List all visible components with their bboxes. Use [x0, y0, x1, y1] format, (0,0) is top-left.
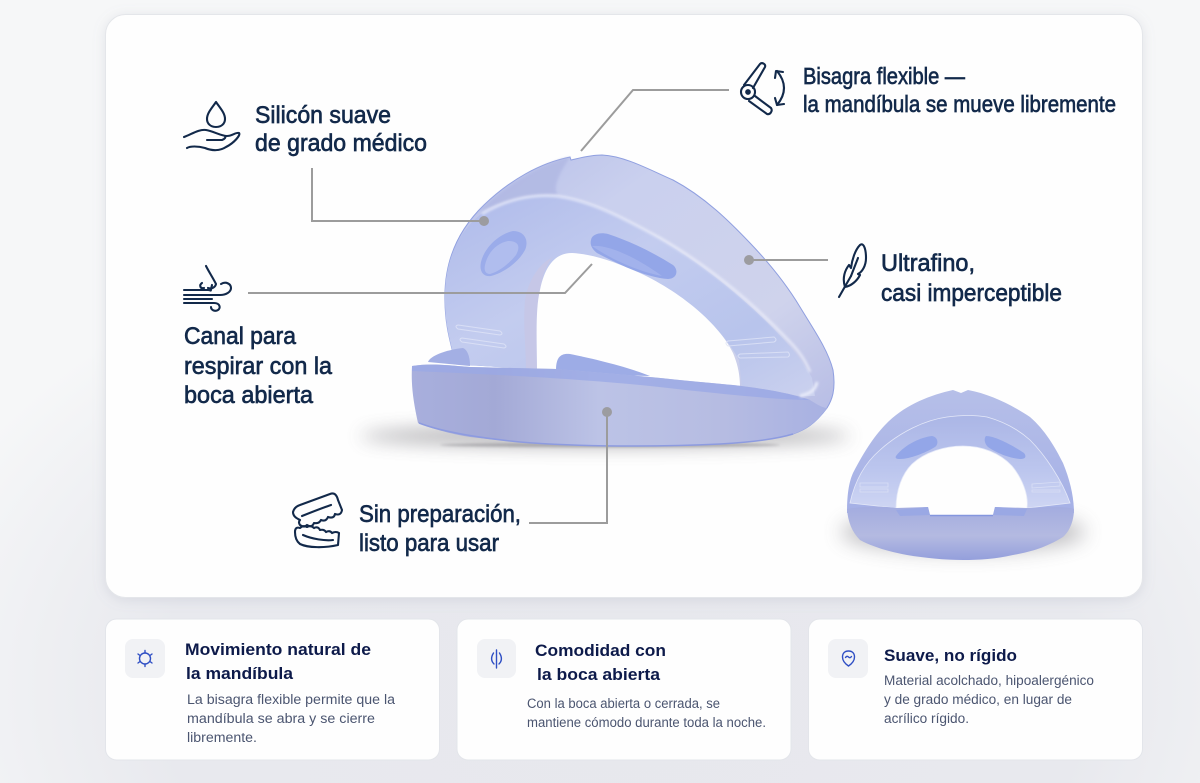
- left slot: [896, 436, 937, 459]
- label: silicone: Silicón suave: [255, 102, 391, 129]
- leader: ultrathin: [744, 255, 828, 265]
- band highlight: [482, 196, 810, 372]
- icon: hand with drop: [184, 102, 239, 150]
- tooth tabs: [896, 507, 1027, 516]
- illustration: small mouthguard front view: [841, 390, 1085, 560]
- right slot: [591, 233, 676, 279]
- label: hinge: la mandíbula se mueve libremente: [803, 91, 1116, 117]
- illustration: main mouthguard side view: [412, 155, 834, 446]
- left tooth guide: [428, 348, 470, 366]
- icon: feather: [839, 244, 866, 297]
- icon: teeth: [293, 493, 342, 547]
- shadow: [841, 512, 1085, 552]
- icon tile: breathing: [477, 639, 516, 678]
- front band: [850, 416, 1070, 508]
- label: breathing channel: boca abierta: [184, 382, 314, 409]
- left slot: [480, 231, 526, 276]
- label: no preparation: Sin preparación,: [359, 501, 521, 528]
- card title: Movimiento natural de: [185, 640, 371, 659]
- leader: breathing channel: [248, 264, 592, 293]
- leader: no preparation: [529, 407, 612, 523]
- right slot: [985, 436, 1025, 459]
- tray lower rim: [419, 423, 793, 446]
- card title: [535, 641, 666, 684]
- inner arm wall: [524, 257, 553, 369]
- label: ultrathin: casi imperceptible: [881, 280, 1062, 307]
- card body: La bisagra flexible permite que la: [187, 692, 396, 707]
- card: natural jaw movement: [106, 619, 440, 760]
- card title: [185, 640, 371, 683]
- front band: [445, 195, 815, 396]
- card title: la mandíbula: [186, 664, 294, 683]
- shaded top-left of shell: [478, 157, 570, 212]
- breathing opening: [537, 253, 740, 388]
- centre tooth ramp: [556, 354, 650, 376]
- card: soft not rigid: [808, 619, 1142, 760]
- label: silicone: [255, 102, 427, 157]
- card title: la boca abierta: [537, 665, 661, 684]
- leader: silicone: [312, 168, 489, 226]
- tray top shading: [412, 364, 810, 400]
- panel: product diagram: [106, 14, 1142, 598]
- card body: mantiene cómodo durante toda la noche.: [527, 715, 766, 730]
- tray top edge: [930, 514, 993, 516]
- dome and tray silhouette: [847, 390, 1074, 513]
- icon tile: soft shield: [828, 639, 868, 678]
- label: breathing channel: respirar con la: [184, 353, 333, 380]
- hinge notch: [800, 382, 817, 396]
- card body: mandíbula se abra y se cierre: [187, 711, 375, 726]
- card: open mouth comfort: [457, 619, 791, 760]
- leader: hinge: [581, 90, 729, 151]
- label: hinge: Bisagra flexible —: [803, 63, 965, 89]
- card title: Comodidad con: [535, 641, 666, 660]
- card body: y de grado médico, en lugar de: [884, 692, 1072, 707]
- grip ridges: [456, 325, 790, 358]
- card title: Suave, no rígido: [884, 646, 1017, 665]
- tray: [847, 507, 1074, 560]
- card body: [527, 696, 766, 730]
- icon: hinge: [741, 63, 784, 114]
- card body: libremente.: [187, 730, 257, 745]
- label: ultrathin: Ultrafino,: [881, 250, 975, 277]
- icon: nose with airflow: [184, 266, 231, 311]
- card body: [884, 673, 1094, 726]
- main mouthguard shadow: [360, 425, 850, 448]
- icon tile: jaw movement: [125, 639, 165, 678]
- label: ultrathin: [881, 250, 1062, 307]
- tray: [412, 364, 827, 446]
- back shell: [445, 155, 834, 434]
- label: breathing channel: Canal para: [184, 323, 297, 350]
- card body: acrílico rígido.: [884, 711, 969, 726]
- label: breathing channel: [184, 323, 333, 409]
- white backing of opening: [896, 446, 1027, 517]
- label: no preparation: [359, 501, 521, 557]
- label: silicone: de grado médico: [255, 130, 427, 157]
- label: hinge: [803, 63, 1116, 117]
- card body: [187, 692, 396, 745]
- card body: Material acolchado, hipoalergénico: [884, 673, 1094, 688]
- label: no preparation: listo para usar: [359, 530, 499, 557]
- grip ridges: [860, 482, 1060, 492]
- card body: Con la boca abierta o cerrada, se: [527, 696, 720, 711]
